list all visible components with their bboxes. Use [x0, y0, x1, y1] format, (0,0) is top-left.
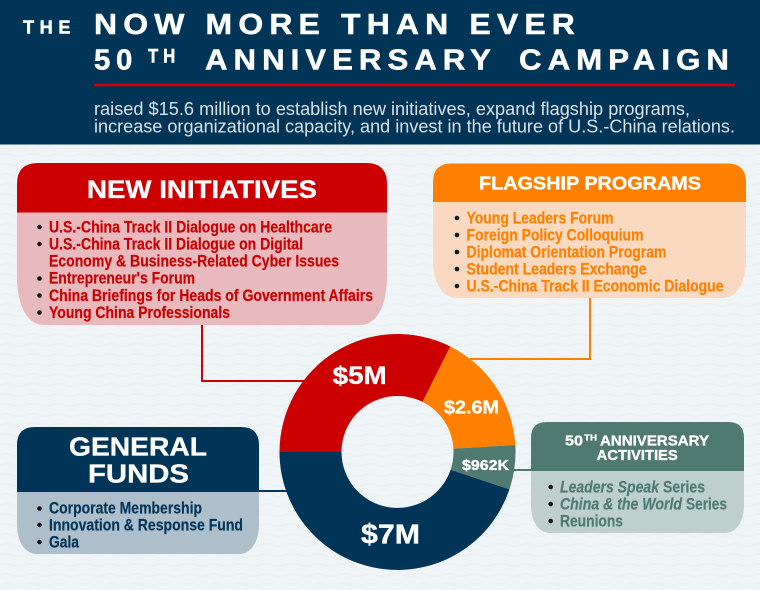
segment: flagship programs $2.6M: [423, 346, 515, 449]
red title rule: [94, 84, 735, 86]
title word: THE: THE: [23, 18, 76, 38]
title line two: TH: [148, 46, 180, 67]
flagship list: Diplomat Orientation Program: [466, 243, 666, 261]
heading: ACTIVITIES: [597, 448, 678, 464]
activities list: Reunions: [560, 512, 623, 530]
activities list: Series: [686, 495, 727, 513]
segment: general funds $7M: [280, 452, 509, 570]
initiatives list: U.S.-China Track II Dialogue on Digital: [49, 235, 303, 253]
heading: TH: [584, 434, 597, 442]
heading: [69, 432, 207, 489]
label: $2.6M: $2.6M: [444, 397, 499, 417]
panel: flagship programs: [433, 164, 746, 298]
header banner: [0, 0, 760, 144]
activities list: Series: [663, 478, 705, 496]
connector: anniversary activities to donut: [505, 469, 531, 471]
subtitle: [94, 98, 735, 137]
initiatives list: Entrepreneur's Forum: [49, 270, 195, 288]
connector: new initiatives to donut: [202, 325, 305, 381]
connector: general funds to donut: [259, 490, 290, 492]
title line two: 50: [94, 44, 138, 76]
initiatives list: U.S.-China Track II Dialogue on Healthcare: [49, 218, 332, 236]
heading: FLAGSHIP PROGRAMS: [479, 174, 701, 194]
title line two: [94, 44, 735, 76]
initiatives list: China Briefings for Heads of Government Affairs: [49, 287, 373, 305]
heading: FUNDS: [88, 459, 189, 489]
heading: [565, 434, 709, 464]
general funds list: Corporate Membership: [49, 500, 202, 518]
label: $7M: $7M: [361, 518, 420, 549]
heading: ANNIVERSARY: [600, 434, 709, 450]
panel: new initiatives: [17, 163, 387, 325]
heading: GENERAL: [69, 432, 207, 462]
general funds list: Innovation & Response Fund: [49, 516, 243, 534]
general funds list: [37, 500, 243, 552]
heading: NEW INITIATIVES: [87, 176, 317, 204]
initiatives list: Economy & Business-Related Cyber Issues: [49, 252, 339, 270]
subtitle: raised $15.6 million to establish new initiatives, expand flagship programs,: [94, 98, 690, 119]
panel: 50th anniversary activities: [531, 422, 744, 533]
initiatives list: [37, 218, 373, 322]
activities list: [548, 478, 727, 530]
initiatives list: Young China Professionals: [49, 304, 230, 322]
flagship list: Foreign Policy Colloquium: [466, 226, 644, 244]
general funds list: Gala: [49, 534, 80, 552]
title line one: NOW MORE THAN EVER: [94, 9, 581, 41]
label: $962K: $962K: [462, 458, 510, 474]
panel: general funds: [17, 427, 259, 554]
segment: new initiatives $5M: [280, 334, 450, 452]
donut chart: [280, 334, 516, 570]
segment: anniversary activities $962K: [451, 445, 516, 489]
label: $5M: $5M: [333, 362, 387, 390]
title line two: ANNIVERSARY: [205, 44, 497, 76]
flagship list: [455, 209, 724, 296]
subtitle: increase organizational capacity, and invest in the future of U.S.-China relations.: [94, 116, 735, 137]
activities list: China & the World: [560, 495, 683, 513]
title line two: CAMPAIGN: [519, 44, 735, 76]
activities list: Leaders Speak: [560, 478, 660, 496]
flagship list: Young Leaders Forum: [466, 209, 614, 227]
connector: flagship programs to donut: [470, 298, 590, 359]
heading: 50: [565, 434, 583, 450]
flagship list: Student Leaders Exchange: [466, 260, 646, 278]
